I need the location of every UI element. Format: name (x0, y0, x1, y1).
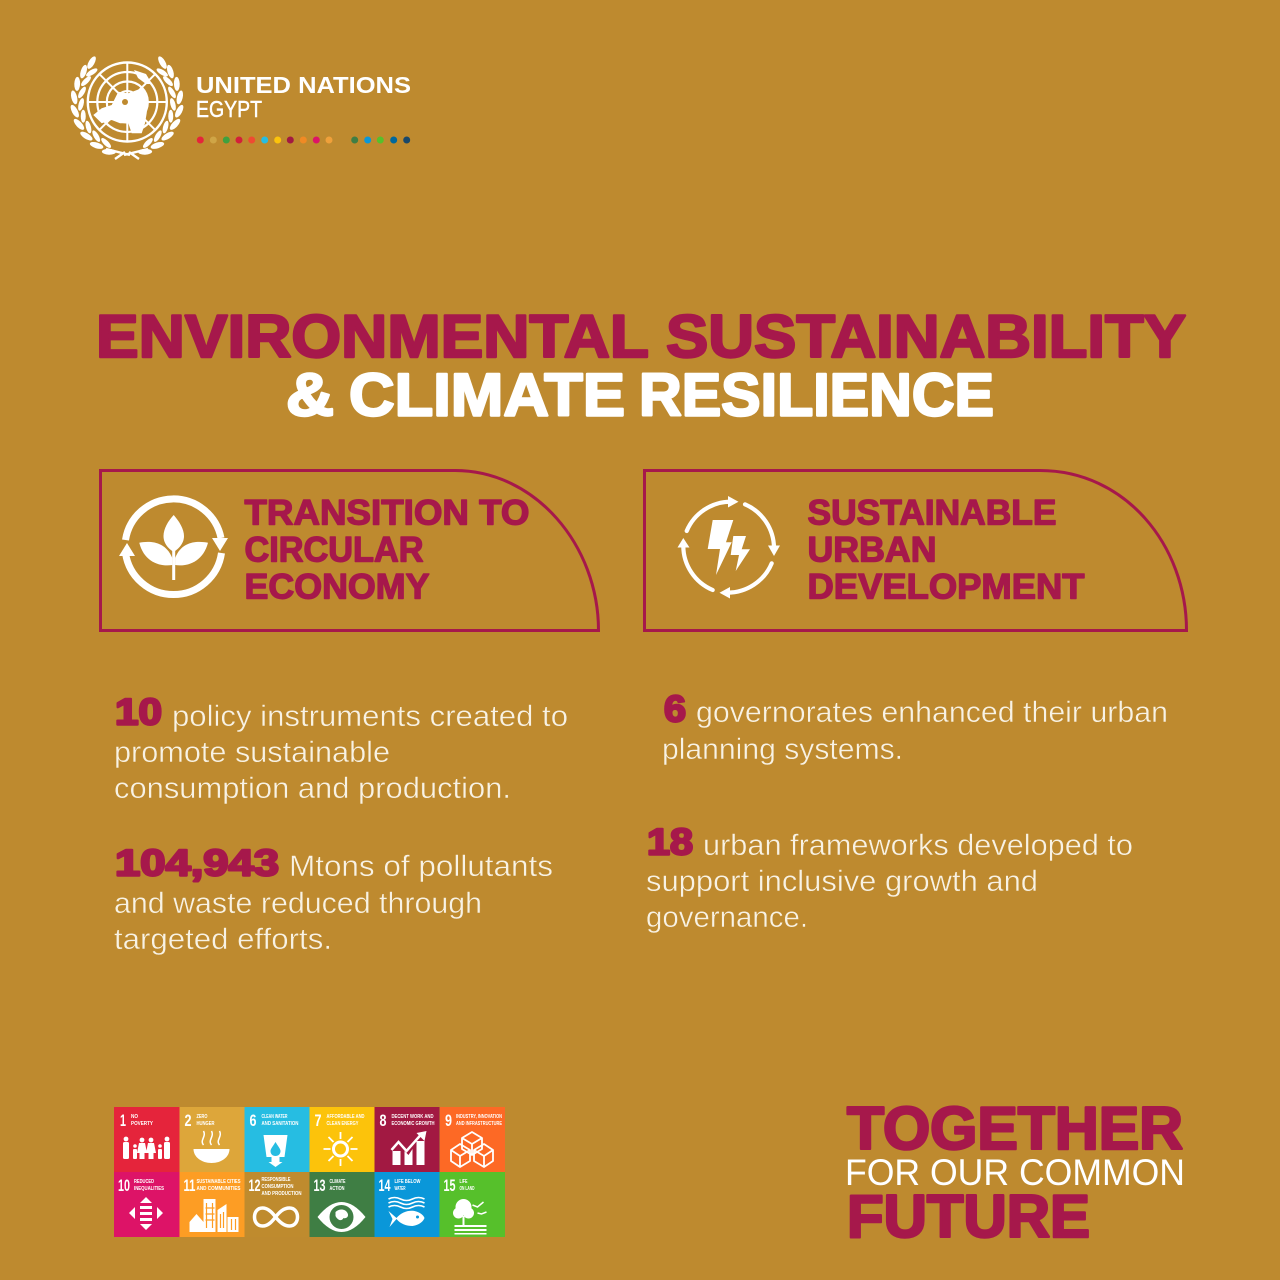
title (96, 303, 1186, 428)
panel heading (244, 494, 530, 606)
text block: 18 urban frameworks: 18 (647, 822, 693, 862)
SDG tile 13: 13 (314, 1176, 326, 1195)
SDG tile 14 (374, 1172, 440, 1237)
panel: transition to circular economy header (100, 470, 598, 630)
text block: 6 governorates: governorates enhanced their urban (696, 696, 1168, 729)
SDG tile 6: 6 (250, 1111, 256, 1130)
logo text: United Nations: UNITED NATIONS (196, 72, 411, 98)
panel heading (808, 494, 1084, 606)
SDG tile 11 (180, 1172, 244, 1237)
panel outline (644, 470, 1186, 630)
SDG tile 7: CLEAN ENERGY (326, 1121, 359, 1127)
SDG tile 1: NO (131, 1114, 138, 1120)
title line 1: ENVIRONMENTAL (96, 303, 649, 370)
SDG tile 8: 8 (380, 1111, 386, 1130)
SDG colour dots (197, 136, 410, 144)
SDG tile 11: 11 (184, 1176, 196, 1195)
SDG tile 15: LIFE (460, 1179, 468, 1185)
SDG tile 13 (310, 1172, 374, 1237)
text block: 10 policy instruments: consumption and production. (114, 772, 511, 805)
SDG tile 15: 15 (444, 1176, 456, 1195)
text block: 6 governorates: 6 (664, 688, 686, 730)
panel heading: SUSTAINABLE (808, 494, 1056, 532)
SDG tile 2: 2 (184, 1111, 192, 1130)
SDG tile 15: ON LAND (460, 1186, 475, 1192)
SDG tile 14: WATER (394, 1186, 406, 1192)
title line 1: SUSTAINABILITY (666, 303, 1186, 370)
text block: 10 policy instruments: 10 (115, 692, 162, 732)
text block: 6 governorates: planning systems. (662, 733, 903, 766)
SDG tile 9 (440, 1107, 505, 1172)
SDG tile 8: ECONOMIC GROWTH (392, 1121, 435, 1127)
SDG tile 13: ACTION (330, 1186, 345, 1192)
SDG tile 11: AND COMMUNITIES (196, 1186, 241, 1192)
SDG tile 12: CONSUMPTION (262, 1184, 294, 1190)
SDG tile 15 (440, 1172, 505, 1237)
SDG icon grid (114, 1107, 505, 1237)
SDG tile 6 (244, 1107, 310, 1172)
text block: 104,943 Mtons (114, 842, 553, 956)
text block: 18 urban frameworks: urban frameworks developed to (703, 829, 1133, 862)
SDG tile 12 (244, 1172, 310, 1237)
text block: 10 policy instruments: promote sustainable (114, 736, 390, 769)
SDG tile 1: 1 (120, 1111, 126, 1130)
SDG tile 6: CLEAN WATER (262, 1114, 288, 1120)
panel outline (100, 470, 598, 630)
SDG tile 1 (114, 1107, 180, 1172)
SDG tile 8 (374, 1107, 440, 1172)
SDG tile 13: CLIMATE (330, 1179, 346, 1185)
SDG tile 14: LIFE BELOW (394, 1179, 421, 1185)
text block: 104,943 Mtons: Mtons of pollutants (289, 850, 553, 883)
SDG tile 9: 9 (445, 1111, 452, 1130)
panel heading: DEVELOPMENT (808, 568, 1084, 606)
title line 2: CLIMATE (349, 362, 625, 428)
SDG tile 1: POVERTY (131, 1121, 154, 1127)
SDG tile 12: 12 (248, 1176, 260, 1195)
text block: 6 governorates (662, 688, 1168, 766)
SDG tile 10: 10 (118, 1176, 130, 1195)
slogan: together for our common future: FOR OUR COMMON (845, 1152, 1185, 1193)
panel heading: URBAN (808, 530, 936, 570)
icon: plant in circular arrows (119, 499, 228, 595)
SDG tile 7: AFFORDABLE AND (326, 1114, 365, 1120)
SDG tile 6: AND SANITATION (262, 1121, 299, 1127)
text block: 104,943 Mtons: and waste reduced through (114, 887, 482, 920)
SDG tile 9: AND INFRASTRUCTURE (456, 1121, 503, 1127)
slogan: together for our common future: TOGETHER (847, 1095, 1183, 1162)
title line 2: RESILIENCE (639, 362, 994, 428)
SDG tile 10: REDUCED (134, 1179, 154, 1185)
SDG tile 12: AND PRODUCTION (262, 1191, 302, 1197)
text block: 104,943 Mtons: 104,943 (115, 842, 279, 884)
SDG tile 14: 14 (378, 1176, 391, 1195)
SDG tile 2: ZERO (196, 1114, 208, 1120)
panel: sustainable urban development header (644, 470, 1186, 630)
logo text: Egypt: EGYPT (196, 96, 262, 122)
panel heading: CIRCULAR (244, 530, 424, 570)
slogan: together for our common future: FUTURE (847, 1183, 1090, 1250)
text block: 10 policy instruments (114, 692, 568, 805)
text block: 10 policy instruments: policy instruments created to (172, 700, 568, 733)
text block: 18 urban frameworks: support inclusive growth and (646, 865, 1038, 898)
SDG tile 10: INEQUALITIES (134, 1186, 165, 1192)
title line 1 (96, 303, 1186, 370)
SDG tile 7: 7 (314, 1111, 322, 1130)
icon: lightning bolts in circular arrows (678, 496, 780, 598)
slogan: together for our common future (845, 1095, 1185, 1250)
text block: 104,943 Mtons: targeted efforts. (114, 923, 332, 956)
text block: 18 urban frameworks: governance. (646, 901, 808, 934)
UN Egypt logo (69, 55, 411, 159)
title line 2: & (286, 362, 334, 428)
text block: 18 urban frameworks (646, 822, 1133, 934)
SDG tile 11: SUSTAINABLE CITIES (196, 1179, 241, 1185)
SDG tile 2 (180, 1107, 244, 1172)
SDG tile 12: RESPONSIBLE (262, 1177, 291, 1183)
SDG tile 10 (114, 1172, 180, 1237)
panel heading: ECONOMY (244, 568, 430, 606)
SDG tile 2: HUNGER (196, 1121, 215, 1127)
icon: UN emblem (69, 55, 185, 159)
SDG tile 7 (310, 1107, 374, 1172)
title line 2 (286, 362, 994, 428)
SDG tile 9: INDUSTRY, INNOVATION (456, 1114, 502, 1120)
SDG tile 8: DECENT WORK AND (392, 1114, 434, 1120)
panel heading: TRANSITION TO (244, 494, 530, 532)
